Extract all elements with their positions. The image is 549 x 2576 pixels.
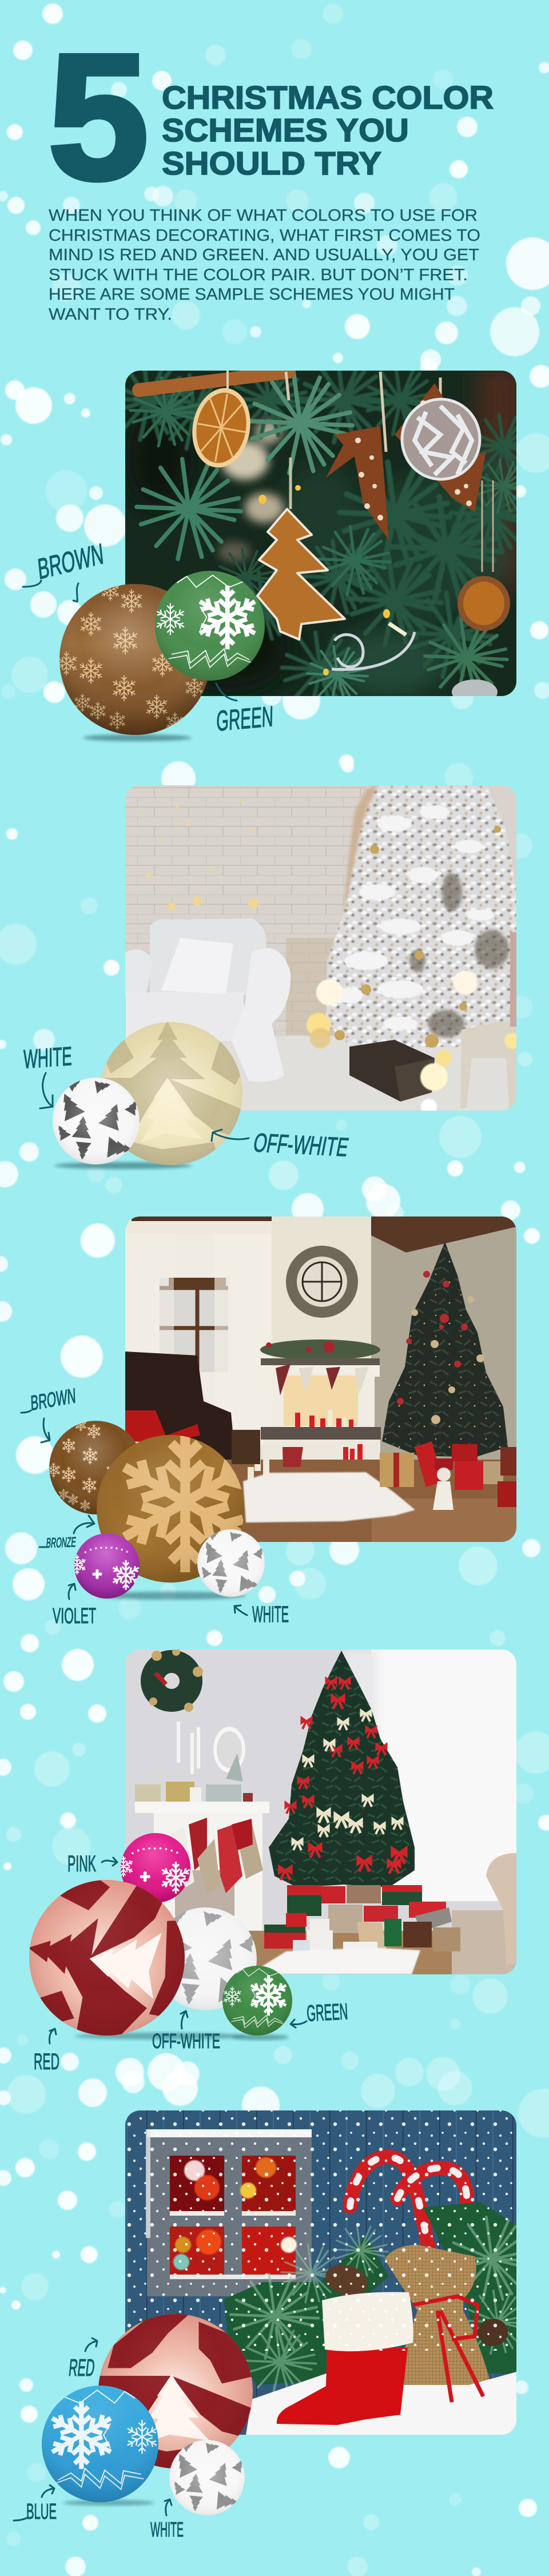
candles <box>295 1413 353 1429</box>
curtain <box>125 1234 272 1445</box>
polka dot bow <box>326 383 486 540</box>
glowing lights <box>307 971 520 1115</box>
text: WHITE <box>252 1602 289 1627</box>
off-white ornament <box>154 1905 260 2010</box>
orange slice <box>192 388 250 468</box>
falling snow <box>125 2110 516 2351</box>
wreath <box>149 1648 203 1712</box>
scheme 4 ornaments: pink, red, off-white and green <box>15 1833 292 2052</box>
photo 5: snowy window and red boot <box>125 2110 536 2435</box>
intro text block: WHEN YOU THINK OF WHAT COLORS TO USE FOR <box>49 206 478 225</box>
window <box>160 1278 228 1372</box>
gift pile <box>264 1885 460 1954</box>
wall clock wreath <box>286 1246 358 1318</box>
shadows <box>97 1592 246 1600</box>
mantel clock <box>213 1727 245 1772</box>
intro text block: MIND IS RED AND GREEN. AND USUALLY, YOU GET <box>49 246 479 264</box>
label: green <box>291 1999 348 2028</box>
label: brown <box>21 1384 76 1442</box>
pine cones <box>321 2259 372 2301</box>
floor <box>125 1460 516 1542</box>
white ornament <box>169 2438 247 2515</box>
gift pile <box>380 1441 516 1510</box>
window <box>146 2129 312 2296</box>
shadows <box>74 2033 246 2040</box>
shadow <box>83 734 192 741</box>
label: brown: BROWN <box>30 1384 76 1415</box>
label: bronze <box>39 1516 94 1551</box>
label: red: RED <box>34 2049 59 2074</box>
intro text block: STUCK WITH THE COLOR PAIR. BUT DON’T FRET. <box>49 266 468 284</box>
wall sparkle lights <box>141 799 258 911</box>
label: blue: BLUE <box>26 2500 57 2524</box>
candy canes <box>350 2157 467 2268</box>
wall right <box>371 1217 516 1462</box>
intro text block: HERE ARE SOME SAMPLE SCHEMES YOU MIGHT <box>49 285 455 304</box>
fireplace <box>272 1373 375 1433</box>
mantel garland <box>260 1339 380 1360</box>
floor <box>125 1931 516 1974</box>
pine branches <box>224 2202 536 2396</box>
off-white ornament <box>96 1020 245 1168</box>
photo 1: natural ornaments on pine tree <box>125 371 516 696</box>
label: off-white <box>152 2011 220 2053</box>
fireplace <box>135 1802 269 1813</box>
stockings <box>170 1818 263 1893</box>
label: pink: PINK <box>67 1851 96 1877</box>
armchair <box>125 1351 236 1464</box>
shadows <box>63 2500 154 2506</box>
white ornament <box>197 1528 267 1597</box>
burlap sack <box>384 2245 493 2403</box>
label: white: WHITE <box>150 2518 184 2541</box>
armchair <box>125 919 291 1082</box>
violet ornament <box>67 1533 141 1599</box>
toy and white candles <box>283 1447 303 1467</box>
candles <box>177 1722 200 1774</box>
red ornament <box>94 2312 256 2471</box>
sofa <box>486 1853 516 1964</box>
cinnamon stick <box>139 372 289 390</box>
red-bow christmas tree <box>269 1651 415 1887</box>
label: red <box>67 2338 97 2381</box>
scheme 2 ornaments: white and off-white <box>53 1020 245 1169</box>
blue ornament <box>42 2386 159 2502</box>
green ornament <box>154 571 265 681</box>
label: white <box>150 2499 184 2541</box>
title: SHOULD TRY <box>162 145 381 182</box>
bronze ornament <box>97 1432 255 1583</box>
photo 4: bright room with red-bow tree <box>125 1648 516 1974</box>
mantel decorations <box>135 1753 253 1807</box>
label: white: WHITE <box>23 1041 72 1074</box>
gift box <box>349 1040 435 1102</box>
label: off-white <box>212 1128 351 1162</box>
label: bronze: BRONZE <box>45 1535 77 1551</box>
label: white <box>23 1041 72 1108</box>
photo 3: warm living room <box>125 1217 516 1542</box>
label: green: GREEN <box>216 700 273 737</box>
brown ornament <box>54 581 210 735</box>
fur rug <box>260 1947 420 1974</box>
title: big number 5: 5 <box>48 18 149 217</box>
snow ground <box>246 2372 516 2435</box>
label: red: RED <box>67 2354 96 2381</box>
label: blue <box>14 2485 57 2524</box>
small orange slice <box>458 576 510 631</box>
label: brown: BROWN <box>36 537 105 586</box>
scheme 5 ornaments: red, blue and white <box>42 2312 256 2515</box>
label: violet <box>53 1584 96 1628</box>
brick wall <box>125 785 365 1037</box>
red boot <box>277 2348 408 2425</box>
flocked christmas tree <box>326 785 516 1048</box>
knitted cuff <box>322 2292 413 2351</box>
title: SCHEMES YOU <box>162 112 409 149</box>
brown ornament <box>46 1419 143 1514</box>
red ribbon <box>413 2296 483 2402</box>
pine needle tufts <box>125 371 516 696</box>
intro text block: CHRISTMAS DECORATING, WHAT FIRST COMES TO <box>49 226 480 245</box>
label: red <box>34 2029 59 2074</box>
fairy lights <box>258 485 390 675</box>
label: green <box>216 683 273 737</box>
pink ornament <box>113 1833 192 1903</box>
title <box>162 79 494 182</box>
label: off-white: OFF-WHITE <box>251 1128 351 1162</box>
title: CHRISTMAS COLOR <box>162 79 494 116</box>
label: green: GREEN <box>306 1999 348 2026</box>
green ornament <box>222 1966 292 2036</box>
photo 2: white room with flocked tree <box>125 785 520 1115</box>
dark christmas tree <box>382 1242 508 1457</box>
chair <box>460 1021 516 1108</box>
white ornament <box>53 1076 142 1164</box>
scheme 3 ornaments: brown, bronze, violet and white <box>46 1419 267 1600</box>
white fur rug <box>243 1472 415 1522</box>
label: white <box>234 1602 289 1627</box>
label: violet: VIOLET <box>53 1604 96 1628</box>
floor <box>125 1036 516 1111</box>
intro text block <box>49 206 480 324</box>
red ornament <box>15 1865 201 2052</box>
gingerbread tree ornament <box>257 509 345 639</box>
intro text block: WANT TO TRY. <box>49 305 172 324</box>
scheme 1 ornaments: brown and green <box>54 571 265 741</box>
label: brown <box>23 537 105 602</box>
shadow <box>54 1162 192 1169</box>
label: off-white: OFF-WHITE <box>152 2029 220 2053</box>
silver ball ornament <box>402 399 480 479</box>
